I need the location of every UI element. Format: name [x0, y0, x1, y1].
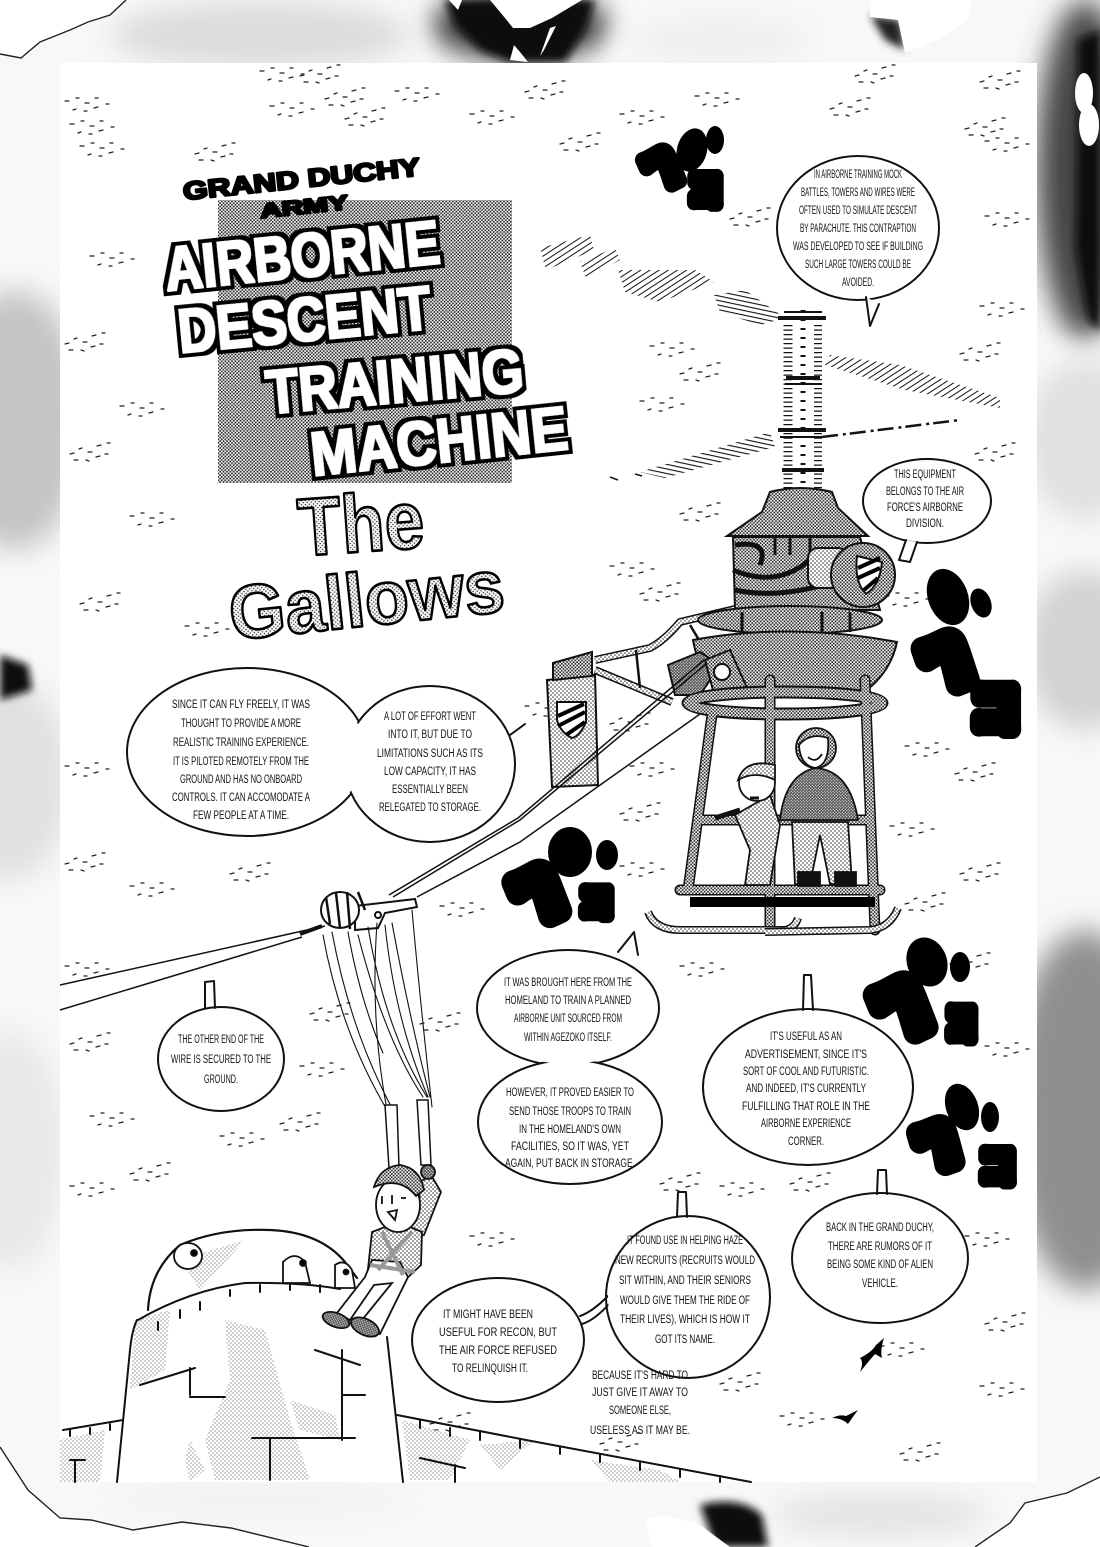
speech bubble: alien rumors: BACK IN THE GRAND DUCHY, — [826, 1222, 934, 1234]
speech bubble: useful as advertisement: SORT OF COOL AND FUTURISTIC. — [743, 1066, 869, 1078]
speech bubble: wire secured to ground — [158, 981, 284, 1111]
title: Airborne Descent Training Machine: MACHINE — [307, 394, 571, 490]
title: The Gallows: The — [295, 474, 427, 574]
speech bubble: useful as advertisement: AIRBORNE EXPERIENCE — [761, 1118, 851, 1130]
speech bubble: alien rumors — [792, 1170, 968, 1323]
sound effect: top: コ — [689, 160, 721, 214]
rotor blades and mast — [540, 235, 1000, 490]
text block: useless as it may be: BECAUSE IT'S HARD TO — [592, 1370, 688, 1382]
burn holes — [490, 0, 582, 28]
pulley — [300, 892, 417, 934]
sound effect: centre — [498, 827, 618, 936]
sound effect: top: ヘ — [632, 124, 696, 200]
base bar and skids — [648, 902, 898, 932]
icon: birds — [832, 1338, 884, 1424]
speech bubbles: brought from homeland — [477, 932, 662, 1184]
speech bubbles: training experience and storage: LOW CAPACITY, IT HAS — [384, 766, 476, 778]
speech bubbles: training experience and storage: THOUGHT TO PROVIDE A MORE — [181, 718, 301, 730]
speech bubbles: training experience and storage: REALISTIC TRAINING EXPERIENCE. — [173, 737, 309, 749]
speech bubble: mock battles: WAS DEVELOPED TO SEE IF BUILDING — [793, 241, 923, 253]
speech bubble: mock battles: SUCH LARGE TOWERS COULD BE — [805, 259, 911, 271]
speech bubbles: brought from homeland: AGAIN, PUT BACK IN STORAGE. — [505, 1158, 635, 1170]
speech bubble: wire secured to ground: GROUND. — [204, 1074, 238, 1086]
speech bubbles: brought from homeland: WITHIN AGEZOKO ITSELF. — [524, 1032, 612, 1044]
cage frame — [680, 680, 882, 930]
speech bubble: mock battles: OFTEN USED TO SIMULATE DESCENT — [799, 205, 917, 217]
speech bubble: air force equipment: FORCE'S AIRBORNE — [887, 502, 963, 514]
sound effect: right one: ヘ — [858, 945, 952, 1055]
speech bubbles: hazing and recon: USEFUL FOR RECON, BUT — [439, 1327, 557, 1339]
title: Grand Duchy Army — [182, 153, 422, 223]
title: Airborne Descent Training Machine — [161, 208, 571, 490]
speech bubble: useful as advertisement: AND INDEED, IT'S CURRENTLY — [746, 1083, 866, 1095]
sound effect: centre: コ — [580, 874, 612, 926]
gearbox — [668, 650, 748, 698]
speech bubble: alien rumors: THERE ARE RUMORS OF IT — [828, 1241, 932, 1253]
title: The Gallows — [225, 474, 508, 657]
sound effect: right two: ヘ — [901, 1095, 979, 1183]
speech bubble: mock battles: BATTLES, TOWERS AND WIRES WERE — [801, 187, 915, 199]
figure: smiling instructor — [780, 728, 858, 886]
speech bubble: wire secured to ground: THE OTHER END OF THE — [178, 1034, 264, 1046]
saucer body — [693, 606, 897, 695]
title: Airborne Descent Training Machine: TRAINING — [263, 337, 526, 428]
camouflage patches — [60, 1240, 680, 1482]
sound effect: right two — [901, 1079, 1014, 1192]
speech bubble: mock battles: AVOIDED. — [842, 277, 874, 289]
dome — [148, 1230, 357, 1310]
speech bubble: wire secured to ground: WIRE IS SECURED TO THE — [171, 1054, 271, 1066]
speech bubbles: hazing and recon: THE AIR FORCE REFUSED — [439, 1345, 557, 1357]
helicopter machine — [547, 488, 898, 932]
icon: side panel with shield — [547, 652, 598, 787]
speech bubbles: training experience and storage: FEW PEOPLE AT A TIME. — [193, 810, 289, 822]
pilot figures — [715, 728, 858, 886]
speech bubbles: brought from homeland: IT WAS BROUGHT HERE FROM THE — [504, 977, 632, 989]
speech bubbles: training experience and storage: SINCE IT CAN FLY FREELY, IT WAS — [172, 699, 310, 711]
speech bubble: useful as advertisement: FULFILLING THAT ROLE IN THE — [742, 1101, 870, 1113]
speech bubble: mock battles — [777, 156, 939, 326]
speech bubbles: hazing and recon: SIT WITHIN, AND THEIR SENIORS — [619, 1275, 751, 1287]
speech bubbles: training experience and storage: ESSENTIALLY BEEN — [392, 784, 468, 796]
title: Grand Duchy Army: ARMY — [259, 192, 350, 223]
speech bubbles: hazing and recon: TO RELINQUISH IT. — [452, 1363, 528, 1375]
parachute lines — [323, 910, 432, 1110]
title: The Gallows: Gallows — [225, 544, 508, 657]
sound effect: beside helicopter: コ — [972, 667, 1018, 743]
wire ropes — [60, 660, 707, 1010]
engine block — [733, 537, 895, 610]
speech bubble: useful as advertisement — [703, 975, 913, 1165]
speech bubble: air force equipment: DIVISION. — [906, 518, 944, 530]
speech bubble: useful as advertisement: CORNER. — [788, 1136, 824, 1148]
sound effect: centre: ヘ — [498, 836, 584, 936]
speech bubble: alien rumors: BEING SOME KIND OF ALIEN — [827, 1259, 933, 1271]
speech bubble: useful as advertisement: IT'S USEFUL AS AN — [770, 1031, 842, 1043]
sound effect: beside helicopter — [906, 563, 1018, 743]
speech bubbles: brought from homeland: HOMELAND TO TRAIN A PLANNED — [505, 995, 631, 1007]
speech bubble: mock battles: IN AIRBORNE TRAINING MOCK — [814, 169, 902, 181]
title: Airborne Descent Training Machine: AIRBORNE — [161, 208, 443, 305]
trainee parachutist — [320, 910, 441, 1341]
speech bubbles: brought from homeland: AIRBORNE UNIT SOURCED FROM — [514, 1013, 622, 1025]
figure body — [320, 1165, 441, 1341]
speech bubbles: training experience and storage: RELEGATED TO STORAGE. — [379, 802, 481, 814]
support arm — [595, 609, 735, 702]
speech bubbles: hazing and recon: THEIR LIVES), WHICH IS HOW IT — [620, 1314, 750, 1326]
speech bubbles: hazing and recon: WOULD GIVE THEM THE RIDE OF — [620, 1295, 750, 1307]
text block: useless as it may be: JUST GIVE IT AWAY TO — [592, 1387, 688, 1399]
title panel: halftone square — [218, 200, 512, 483]
speech bubble: air force equipment: BELONGS TO THE AIR — [886, 486, 964, 498]
text block: useless as it may be — [590, 1370, 690, 1437]
sound effect: right two: コ — [980, 1134, 1014, 1192]
sound effect: top — [632, 124, 724, 214]
speech bubbles: training experience and storage: GROUND AND HAS NO ONBOARD — [180, 774, 302, 786]
speech bubbles: brought from homeland: SEND THOSE TROOPS TO TRAIN — [509, 1106, 631, 1118]
speech bubbles: training experience and storage: A LOT OF EFFORT WENT — [384, 711, 476, 723]
figure: nervous trainee — [715, 763, 780, 885]
gargoyle and turret heads — [174, 1243, 355, 1288]
speech bubbles: training experience and storage: CONTROLS. IT CAN ACCOMODATE A — [172, 792, 310, 804]
sound effect: beside helicopter: ヘ — [906, 604, 994, 704]
speech bubbles: hazing and recon — [412, 1192, 770, 1402]
speech bubbles: brought from homeland: FACILITIES, SO IT WAS, YET — [511, 1141, 629, 1153]
speech bubble: alien rumors: VEHICLE. — [862, 1278, 898, 1290]
speech bubbles: training experience and storage: INTO IT, BUT DUE TO — [388, 729, 472, 741]
speech bubbles: hazing and recon: IT FOUND USE IN HELPING HAZE — [627, 1235, 743, 1247]
speech bubbles: training experience and storage: IT IS PILOTED REMOTELY FROM THE — [173, 756, 309, 768]
speech bubbles: training experience and storage: LIMITATIONS SUCH AS ITS — [377, 748, 483, 760]
straps — [385, 1100, 431, 1168]
speech bubbles: brought from homeland: IN THE HOMELAND'S OWN — [519, 1124, 621, 1136]
text block: useless as it may be: USELESS AS IT MAY BE. — [590, 1425, 690, 1437]
speech bubble: useful as advertisement: ADVERTISEMENT, SINCE IT'S — [745, 1049, 867, 1061]
speech bubbles: training experience and storage — [127, 668, 525, 842]
speech bubbles: brought from homeland: HOWEVER, IT PROVED EASIER TO — [506, 1087, 634, 1099]
title: Airborne Descent Training Machine: DESCENT — [175, 274, 434, 367]
speech bubbles: hazing and recon: IT MIGHT HAVE BEEN — [443, 1309, 533, 1321]
text block: useless as it may be: SOMEONE ELSE, — [609, 1405, 671, 1417]
background speckle dashes — [65, 65, 1029, 1461]
fortress tower — [60, 1230, 751, 1482]
speech bubble: air force equipment — [863, 459, 991, 562]
speech bubble: air force equipment: THIS EQUIPMENT — [894, 469, 956, 481]
speech bubbles: hazing and recon: GOT ITS NAME. — [655, 1334, 715, 1346]
sound effect: right one: コ — [946, 994, 976, 1050]
walls — [63, 1283, 751, 1482]
speech bubbles: hazing and recon: NEW RECRUITS (RECRUITS WOULD — [615, 1255, 755, 1267]
speech bubble: mock battles: BY PARACHUTE. THIS CONTRAPTION — [800, 223, 916, 235]
title: Grand Duchy Army: GRAND DUCHY — [182, 153, 422, 206]
engine cap — [727, 488, 868, 536]
